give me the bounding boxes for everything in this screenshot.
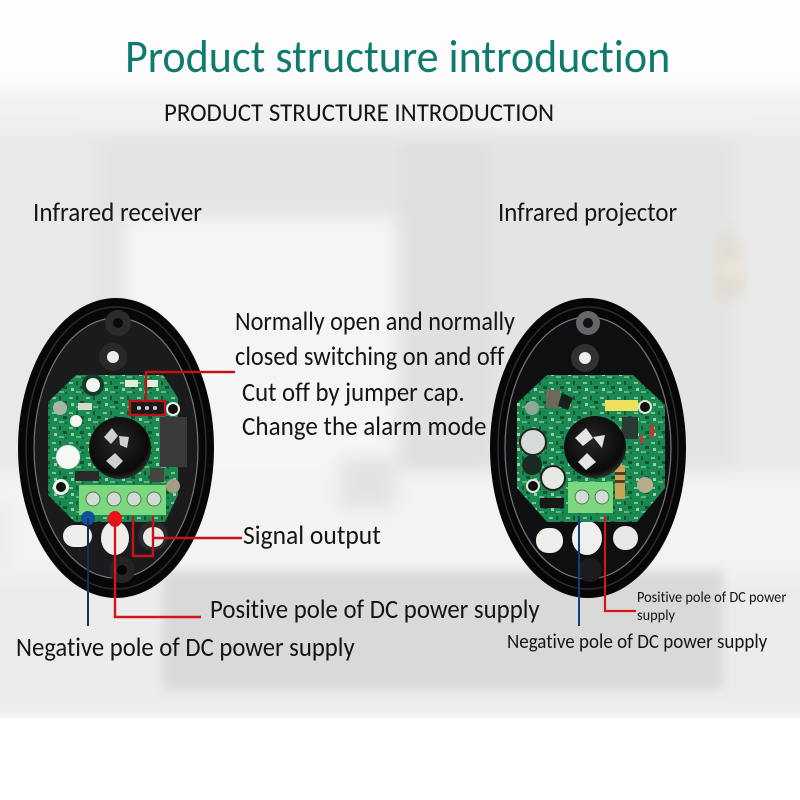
callout: jumper cap text: Normally open and normally	[235, 306, 515, 338]
callout: projector positive pole: Positive pole of DC power	[637, 588, 786, 607]
callout: signal output: Signal output	[243, 520, 381, 552]
signal output line	[133, 516, 242, 556]
housing	[18, 298, 214, 598]
jumper callout line	[130, 372, 235, 415]
circuit board	[48, 374, 187, 522]
callout: receiver positive pole: Positive pole of DC power supply	[210, 594, 540, 626]
label: infrared receiver: Infrared receiver	[33, 197, 202, 229]
callout: jumper cap text: Cut off by jumper cap.	[242, 377, 465, 409]
callout: jumper cap text: Change the alarm mode	[242, 411, 487, 443]
negative pole marker	[81, 511, 95, 626]
device: infrared receiver	[18, 298, 242, 626]
callout: jumper cap text	[235, 306, 515, 443]
callout: projector positive pole: supply	[637, 606, 675, 625]
callout: receiver negative pole: Negative pole of DC power supply	[16, 632, 355, 664]
housing	[490, 298, 686, 598]
negative pole line	[578, 516, 580, 626]
callout: jumper cap text: closed switching on and off	[235, 341, 504, 373]
positive pole line	[605, 516, 636, 611]
callout: projector negative pole: Negative pole of DC power supply	[507, 628, 767, 654]
subtitle: PRODUCT STRUCTURE INTRODUCTION	[164, 96, 554, 128]
callout: projector positive pole	[637, 588, 786, 625]
positive pole marker	[108, 511, 201, 617]
title: Product structure introduction	[125, 29, 670, 85]
circuit board	[517, 375, 665, 522]
device: infrared projector	[490, 298, 686, 626]
label: infrared projector: Infrared projector	[498, 197, 677, 229]
